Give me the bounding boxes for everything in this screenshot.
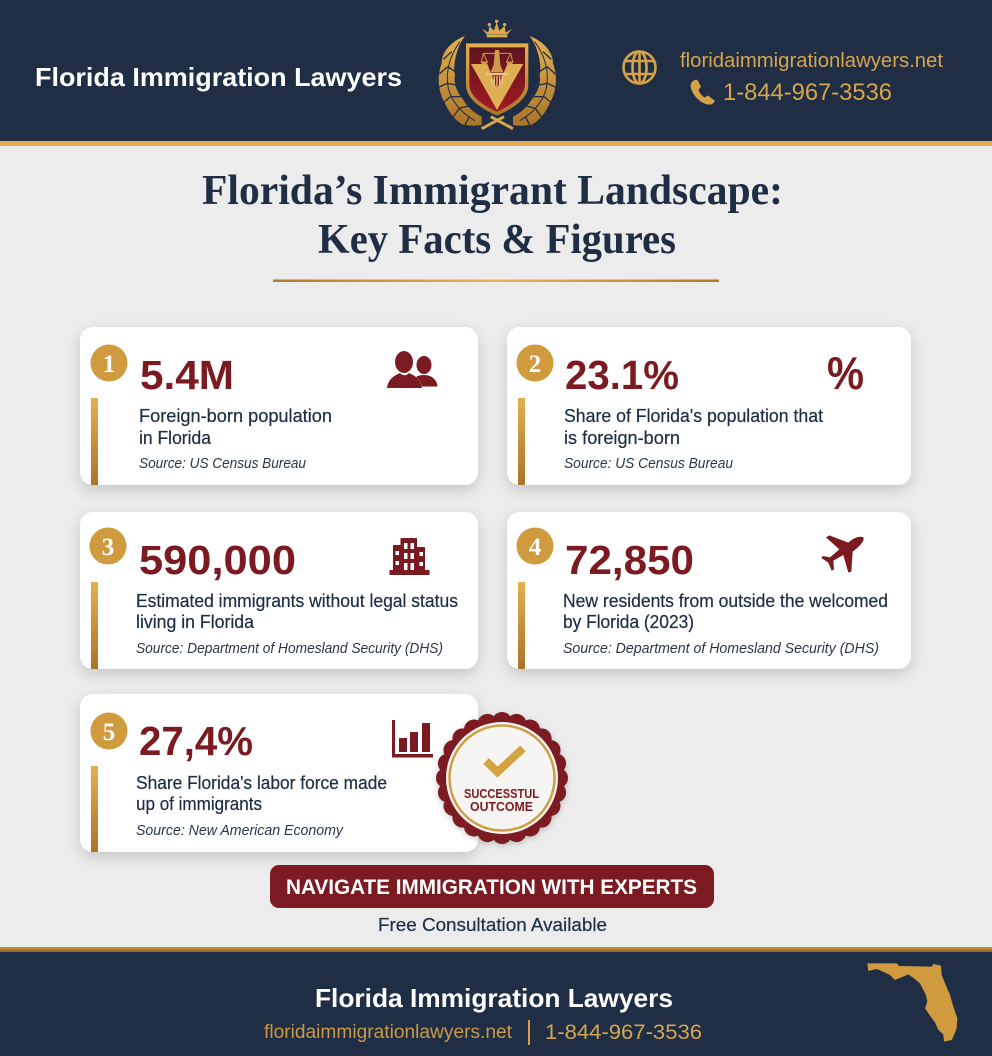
stat 23.1%: 23.1%	[565, 352, 679, 398]
source: Source: US Census Bureau	[564, 456, 733, 472]
call-to-action button: NAVIGATE IMMIGRATION WITH EXPERTS	[286, 875, 697, 899]
seal text: SUCCESSTUL	[464, 787, 539, 801]
icon: bar chart	[392, 720, 433, 758]
badge 5	[90, 712, 128, 750]
icon: check mark	[486, 748, 523, 772]
stat 72,850: 72,850	[565, 537, 694, 583]
panel: card 1	[80, 327, 478, 485]
description	[136, 591, 458, 632]
panel: card 3	[80, 512, 478, 669]
footer website: floridaimmigrationlawyers.net	[264, 1022, 513, 1043]
stat 590,000: 590,000	[139, 537, 296, 583]
icon: shield	[466, 43, 528, 116]
panel: card 4	[507, 512, 911, 669]
call-to-action button	[270, 865, 714, 908]
badge 2	[516, 344, 554, 382]
icon: globe	[624, 52, 656, 84]
icon: phone	[691, 80, 715, 105]
badge 4	[516, 528, 554, 564]
description: is foreign-born	[564, 428, 680, 448]
footer firm name: Florida Immigration Lawyers	[315, 983, 673, 1013]
title: Florida’s Immigrant Landscape:	[202, 168, 783, 214]
icon: building	[390, 538, 430, 575]
icon: right laurel	[513, 36, 556, 126]
title: Key Facts & Figures	[318, 217, 676, 263]
icon: crown	[482, 20, 512, 37]
description: in Florida	[139, 428, 212, 448]
badge 2: 2	[529, 351, 541, 378]
footer band	[0, 947, 992, 1056]
header band	[0, 0, 992, 146]
icon: percent: %	[827, 347, 864, 399]
title divider	[273, 280, 719, 282]
description	[563, 591, 888, 632]
seal text	[464, 787, 539, 814]
header phone number: 1-844-967-3536	[723, 79, 892, 106]
description: Share Florida's labor force made	[136, 773, 387, 793]
icon: plane	[821, 535, 864, 573]
panel: card 5	[80, 694, 478, 852]
source: Source: Department of Homesland Security (DHS)	[563, 641, 879, 657]
description: New residents from outside the welcomed	[563, 591, 888, 611]
panel: card 2	[507, 327, 911, 485]
badge 1	[90, 344, 128, 382]
description: Estimated immigrants without legal status	[136, 591, 458, 611]
icon: left laurel	[438, 36, 482, 126]
source: Source: Department of Homesland Security (DHS)	[136, 641, 443, 657]
description	[564, 406, 823, 448]
icon: Florida map	[867, 963, 957, 1042]
description: Share of Florida's population that	[564, 406, 823, 426]
description: living in Florida	[136, 612, 255, 632]
seal text: OUTCOME	[470, 800, 533, 814]
source: Source: US Census Bureau	[139, 456, 306, 472]
badge 3: 3	[102, 534, 114, 561]
header website: floridaimmigrationlawyers.net	[680, 50, 943, 72]
source: Source: New American Economy	[136, 823, 344, 839]
badge 3	[90, 528, 126, 564]
icon: people	[387, 351, 438, 388]
description: Foreign-born population	[139, 406, 332, 426]
stat 5.4M: 5.4M	[140, 352, 234, 398]
description: up of immigrants	[136, 794, 262, 814]
badge 1: 1	[103, 351, 115, 378]
stat 27,4%: 27,4%	[139, 718, 253, 764]
description	[139, 406, 332, 448]
title	[202, 168, 783, 263]
footer separator	[528, 1020, 530, 1045]
badge 5: 5	[103, 719, 115, 746]
icon: laurel tie	[482, 117, 513, 129]
footer phone: 1-844-967-3536	[545, 1021, 702, 1044]
seal: successful outcome	[436, 712, 568, 844]
header firm name: Florida Immigration Lawyers	[35, 62, 402, 92]
icon: law firm crest	[438, 20, 556, 129]
description	[136, 773, 387, 814]
description: by Florida (2023)	[563, 612, 694, 632]
badge 4: 4	[529, 534, 542, 561]
consultation note: Free Consultation Available	[378, 915, 607, 935]
